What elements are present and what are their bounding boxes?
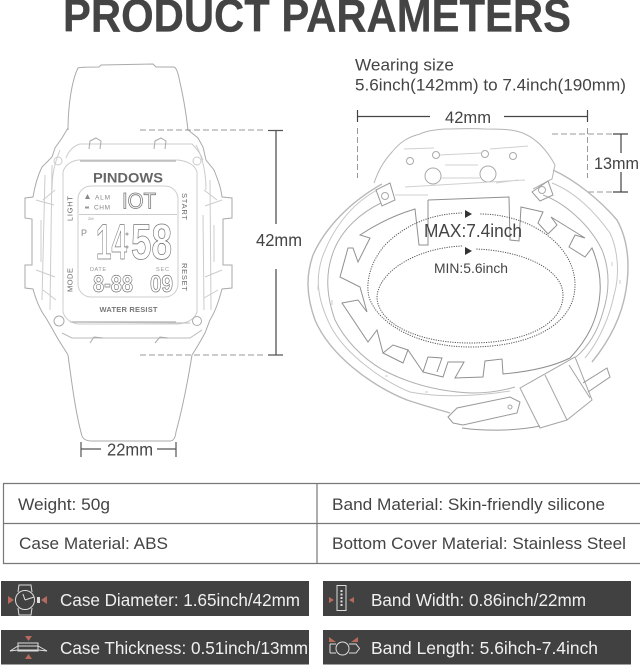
button labels: START (180, 193, 189, 220)
LCD screen: ALM (95, 194, 110, 202)
LCD screen (78, 186, 178, 298)
spec table: Bottom Cover Material: Stainless Steel (332, 535, 626, 553)
button labels (66, 193, 189, 292)
bar: case diameter: Case Diameter: 1.65inch/42mm (60, 590, 300, 610)
min wrist label: MIN:5.6inch (434, 261, 508, 276)
bar: band width: Band Width: 0.86inch/22mm (371, 590, 586, 610)
LCD screen: 58 (131, 214, 172, 270)
wearing size text (355, 56, 626, 94)
spec table (3, 483, 640, 564)
max wrist label: MAX:7.4inch (424, 221, 522, 241)
LCD screen: 8-88 (93, 271, 133, 298)
button labels: LIGHT (66, 196, 74, 221)
bar: band width (323, 581, 631, 616)
icon: case thickness (10, 636, 47, 659)
inner gear slot (340, 197, 600, 378)
dimension: thickness 13mm: 13mm (594, 155, 639, 173)
spec table: Weight: 50g (18, 496, 110, 514)
case screws and ports (395, 146, 528, 195)
LCD screen: P (81, 228, 87, 238)
LCD screen: 2M (88, 216, 94, 221)
case side (374, 129, 555, 189)
dimension: case height 42mm: 42mm (256, 230, 302, 250)
bar: case diameter (1, 581, 309, 616)
dimension: top width 42mm: 42mm (445, 109, 491, 127)
watch front view (25, 64, 232, 441)
dimension: band width 22mm: 22mm (107, 440, 153, 460)
button labels: RESET (180, 263, 189, 291)
button labels: MODE (66, 268, 74, 292)
spec table: Band Material: Skin-friendly silicone (332, 496, 605, 514)
LCD screen: CHM (94, 204, 110, 212)
spec table: Case Material: ABS (19, 535, 168, 553)
icon: watch diameter (8, 585, 47, 615)
wearing size text: Wearing size (355, 56, 454, 74)
band lugs (376, 181, 553, 206)
LCD screen: SEC (156, 267, 169, 273)
LCD screen: 14 (96, 214, 127, 270)
upper strap (68, 64, 188, 130)
dimension: thickness 13mm (552, 134, 639, 192)
outer band (308, 170, 628, 413)
case buttons (54, 138, 202, 343)
lower strap (68, 355, 192, 441)
buckle and keeper (520, 357, 592, 428)
bar: band length: Band Length: 5.6ihch-7.4inch (371, 638, 598, 658)
dimension: top width 42mm (357, 109, 588, 178)
icon: band width (329, 586, 354, 610)
case inner details (36, 144, 222, 338)
watch brand: PINDOWS (93, 170, 163, 186)
dimension: band width 22mm (81, 440, 176, 460)
bar: case thickness (1, 630, 309, 664)
watch side view drawing (308, 129, 628, 430)
LCD screen: 09 (150, 271, 173, 298)
bar: case thickness: Case Thickness: 0.51inch/13mm (60, 638, 308, 658)
dimension: case height 42mm (140, 130, 302, 355)
LCD screen: IOT (122, 188, 156, 214)
watch case outline (25, 128, 232, 355)
wrist size dotted ellipses (368, 210, 575, 347)
LCD screen: DATE (90, 267, 106, 273)
water resist label: WATER RESIST (100, 305, 158, 314)
wearing size text: 5.6inch(142mm) to 7.4inch(190mm) (355, 76, 626, 94)
icon: band length (329, 637, 360, 655)
bar: band length (323, 630, 631, 664)
